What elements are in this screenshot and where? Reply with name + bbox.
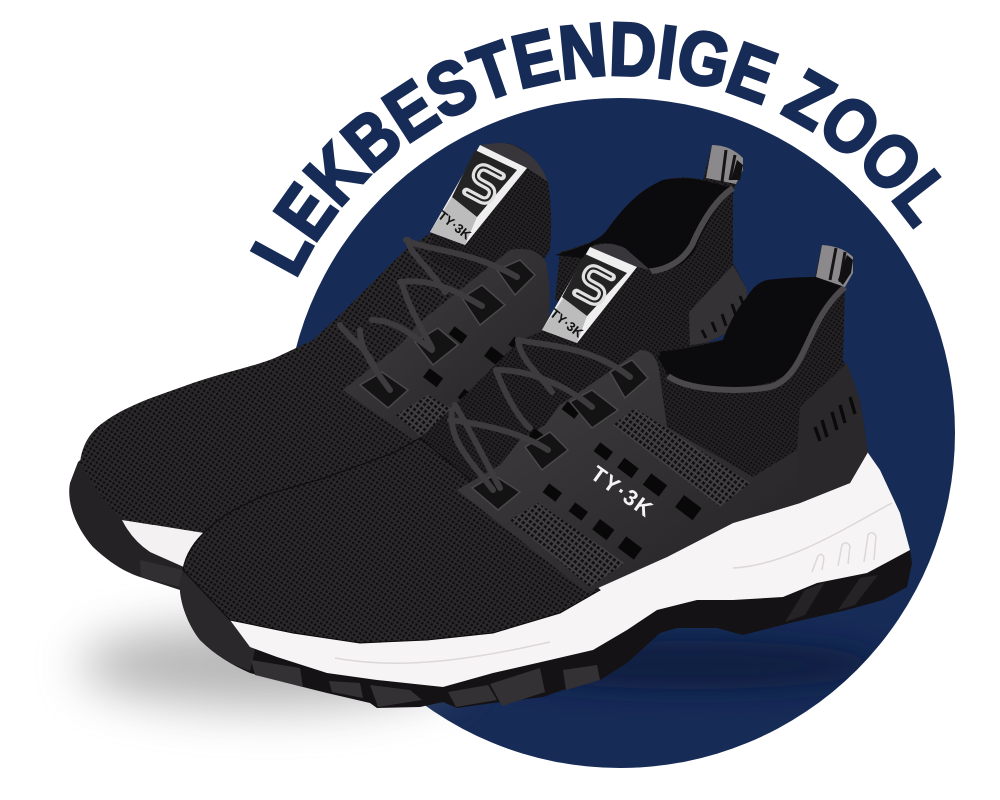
- front shoe heel panel: [767, 363, 868, 513]
- rear shoe heel and collar: [555, 145, 747, 352]
- front shoe mesh upper: [183, 438, 600, 643]
- front shoe white midsole: [230, 450, 910, 687]
- shadow under the shoes: [80, 623, 880, 707]
- front shoe mesh behind laces: [420, 330, 660, 560]
- front shoe toe bumper: [180, 570, 255, 671]
- rear shoe outsole lug: [140, 560, 183, 587]
- rear tongue logo: [466, 165, 502, 203]
- rear tongue brand: TY·3K: [435, 208, 474, 243]
- navy background circle: [285, 98, 955, 768]
- front tongue brand: TY·3K: [547, 306, 586, 341]
- front shoe laces: [450, 340, 630, 490]
- front shoe heel slots: [815, 397, 855, 441]
- rear shoe white midsole: [122, 520, 204, 568]
- front shoe outsole lugs: [251, 575, 878, 707]
- rear shoe lace cage: [343, 249, 550, 440]
- front shoe eyelets: [472, 360, 648, 510]
- front tongue logo: [576, 266, 612, 304]
- front shoe lace cage: [457, 350, 800, 593]
- rear shoe mesh upper: [80, 232, 550, 533]
- rear shoe eyelets: [360, 260, 535, 408]
- rear shoe sole: [69, 450, 205, 590]
- front shoe outsole: [180, 540, 912, 708]
- rear cage grid panel: [396, 395, 462, 440]
- rear shoe: [69, 143, 747, 590]
- midsole contour lines: [335, 503, 892, 663]
- front shoe cage windows: [529, 401, 702, 560]
- brand mark TY-3K: TY·3K: [586, 461, 658, 523]
- front cage grid panels: [510, 408, 750, 587]
- front shoe tongue: [540, 243, 660, 375]
- front shoe: [180, 243, 912, 708]
- rear shoe tongue: [430, 143, 551, 300]
- front shoe heel collar: [655, 245, 868, 500]
- curved title: LEKBESTENDIGE ZOOL: [250, 21, 942, 278]
- rear shoe laces: [340, 240, 517, 390]
- rear shoe cage windows: [423, 326, 526, 407]
